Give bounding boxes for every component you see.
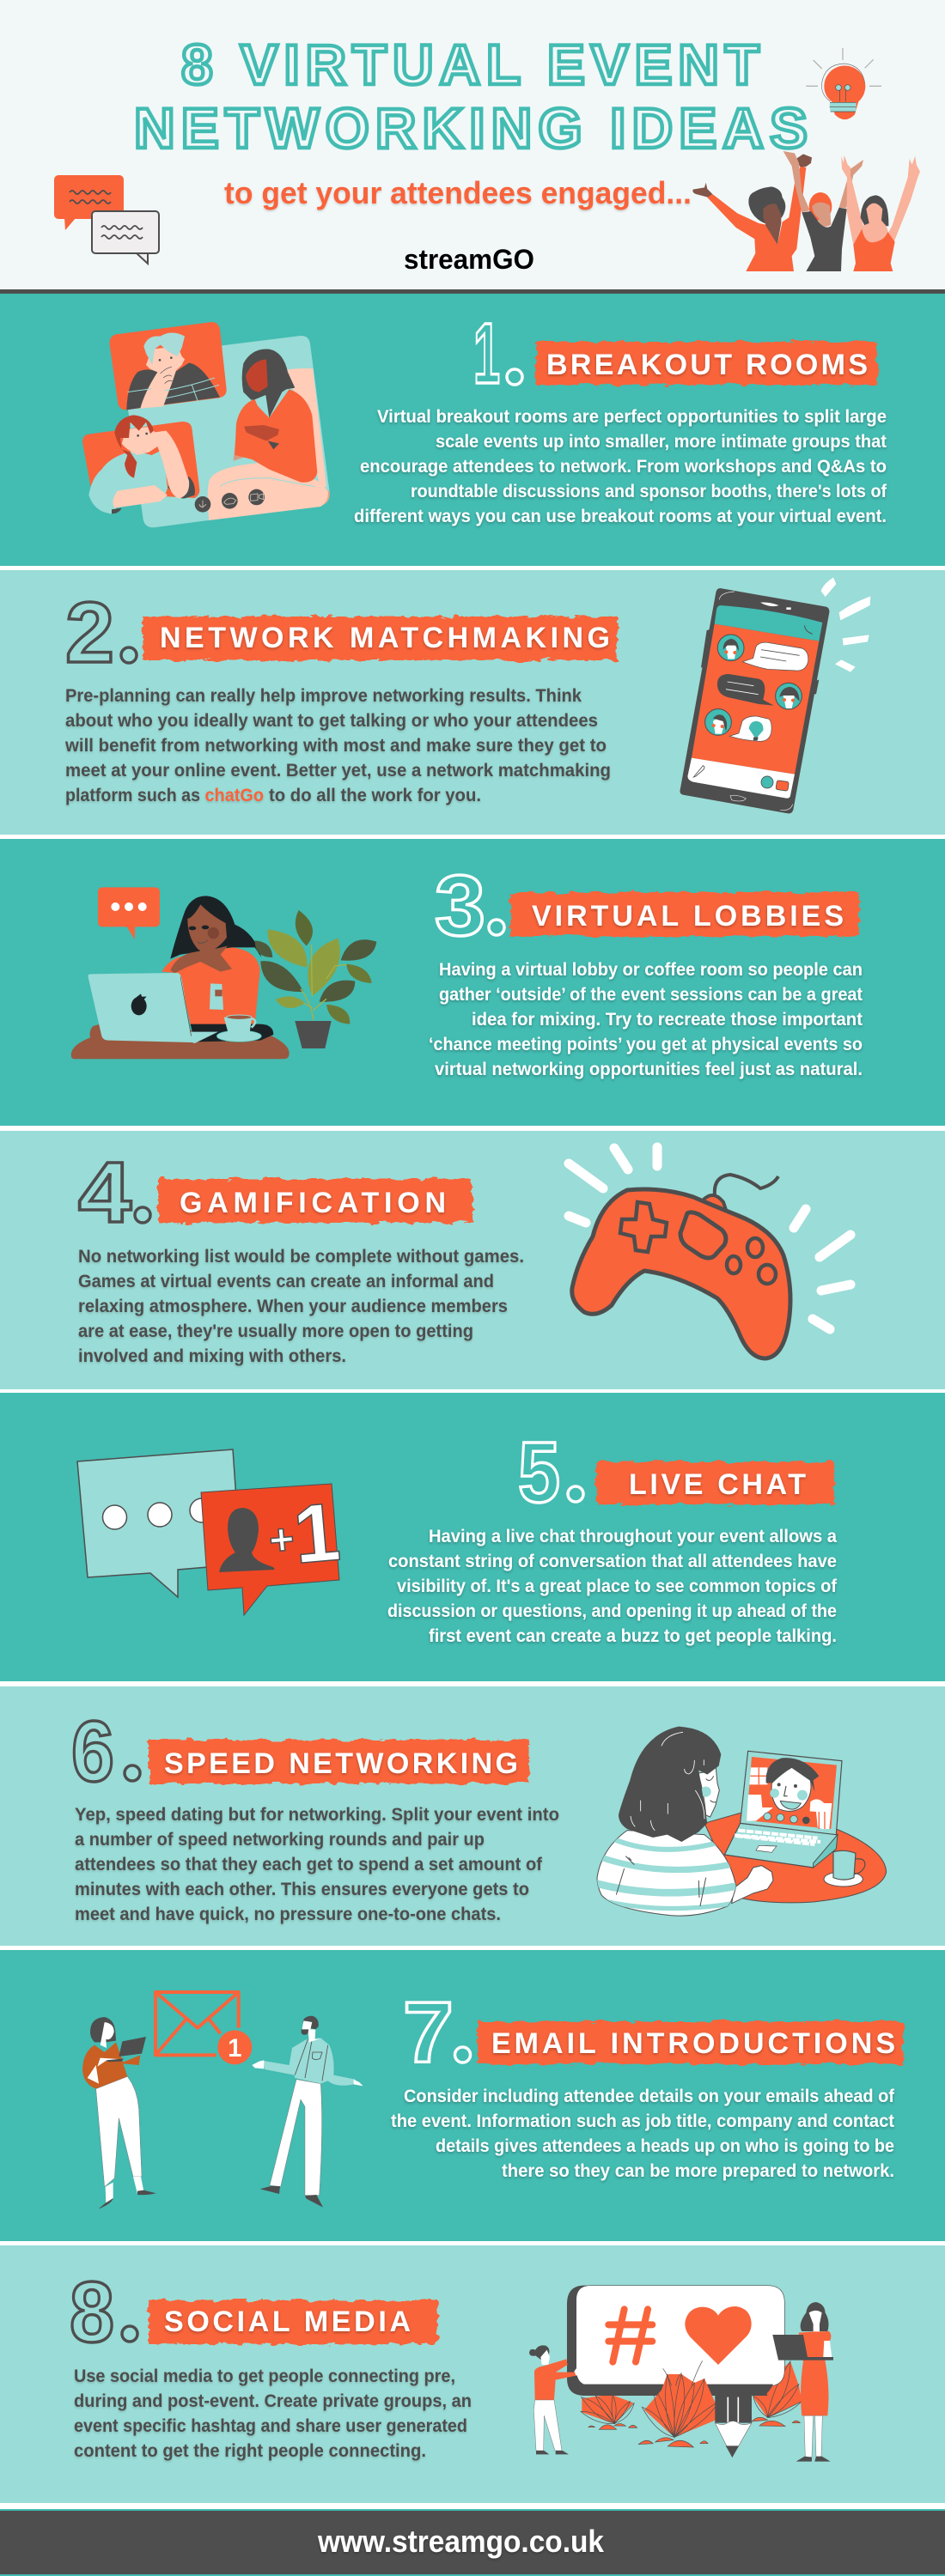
heading: live chat	[596, 1461, 834, 1504]
body text 6: minutes with each other. This ensures everyone gets to	[75, 1879, 529, 1899]
heading: live chat: LIVE CHAT	[629, 1468, 806, 1501]
body text 2: platform such as	[65, 785, 200, 805]
illustration: chat bubbles with plus one	[77, 1449, 344, 1615]
footer band	[0, 2509, 945, 2576]
body text 4: relaxing atmosphere. When your audience members	[78, 1296, 508, 1316]
ordinal ring 7	[455, 2047, 471, 2063]
illustration: email exchange	[82, 1992, 363, 2209]
body text 5	[387, 1526, 838, 1646]
ordinal ring 4	[135, 1207, 150, 1223]
body text 8: Use social media to get people connecting pre,	[74, 2366, 455, 2386]
body text 5: first event can create a buzz to get people talking.	[429, 1625, 837, 1646]
body text 5: Having a live chat throughout your event allows a	[429, 1526, 838, 1546]
body text 3: gather ‘outside’ of the event sessions can be a great	[439, 984, 863, 1005]
body text 6	[75, 1804, 559, 1924]
website url: www.streamgo.co.uk	[317, 2524, 605, 2559]
body text 2: will benefit from networking with most and make sure they get to	[64, 735, 607, 756]
icon: heart	[685, 2306, 752, 2365]
number 3: 3	[435, 858, 485, 954]
ordinal ring 5	[568, 1486, 583, 1502]
heading: email introductions: EMAIL INTRODUCTIONS	[491, 2027, 895, 2060]
illustration: woman at laptop	[71, 887, 376, 1059]
plus one: +	[267, 1515, 296, 1564]
illustration: smartphone chat	[680, 578, 870, 813]
body text 2: about who you ideally want to get talking or who your attendees	[65, 710, 598, 731]
body text 3	[429, 959, 863, 1079]
body text 2: meet at your online event. Better yet, use a network matchmaking	[65, 760, 611, 781]
heading: social media: SOCIAL MEDIA	[164, 2306, 411, 2338]
body text 1: Virtual breakout rooms are perfect opportunities to split large	[377, 406, 887, 427]
body text 4: Games at virtual events can create an informal and	[78, 1271, 494, 1291]
ordinal ring 6	[125, 1765, 140, 1781]
illustration: hashtag and heart board	[529, 2286, 833, 2462]
icon: envelope	[155, 1992, 252, 2064]
number 4: 4	[78, 1145, 131, 1241]
illustration: cheering people	[692, 151, 920, 271]
illustration: video call	[82, 322, 330, 527]
body text 1: encourage attendees to network. From workshops and Q&As to	[360, 456, 887, 477]
body text 1: scale events up into smaller, more intimate groups that	[436, 431, 887, 452]
panel: 4 gamification	[0, 1131, 945, 1389]
panel: 7 email introductions	[0, 1950, 945, 2241]
plus one: 1	[290, 1485, 344, 1581]
number 7: 7	[403, 1984, 454, 2081]
body text 4: No networking list would be complete without games.	[78, 1246, 524, 1267]
subtitle: to get your attendees engaged...	[224, 175, 692, 210]
illustration: game controller	[569, 1147, 850, 1358]
ordinal ring 2	[121, 647, 137, 663]
heading: speed networking: SPEED NETWORKING	[164, 1747, 518, 1780]
heading: virtual lobbies: VIRTUAL LOBBIES	[532, 900, 844, 933]
body text 8: during and post-event. Create private groups, an	[74, 2391, 472, 2411]
heading: gamification	[158, 1179, 472, 1223]
body text 6: attendees so that they each get to spend a set amount of	[75, 1854, 543, 1874]
body text 3: virtual networking opportunities feel just as natural.	[435, 1059, 863, 1079]
body text 8: event specific hashtag and share user generated	[74, 2415, 467, 2436]
ordinal ring 1	[507, 369, 522, 385]
body text 7: the event. Information such as job title, company and contact	[391, 2111, 894, 2131]
body text 3: ‘chance meeting points’ you get at physical events so	[429, 1034, 863, 1054]
title: 8 VIRTUAL EVENT	[181, 33, 759, 96]
icon: hashtag	[608, 2309, 652, 2362]
title: NETWORKING IDEAS	[134, 96, 808, 160]
body text 2: Pre-planning can really help improve networking results. Think	[65, 685, 582, 706]
heading: network matchmaking: NETWORK MATCHMAKING	[160, 622, 610, 654]
panel: 5 live chat	[0, 1393, 945, 1681]
body text 7	[391, 2086, 895, 2181]
body text 5: discussion or questions, and opening it up ahead of the	[387, 1601, 837, 1621]
heading: gamification: GAMIFICATION	[180, 1187, 446, 1219]
body text 6: meet and have quick, no pressure one-to-one chats.	[75, 1904, 501, 1924]
header panel	[0, 0, 945, 294]
illustration: woman on video call	[595, 1727, 887, 1916]
ordinal ring 3	[489, 920, 504, 935]
panel: 8 social media	[0, 2245, 945, 2503]
streamGO logo: streamGO	[404, 244, 534, 275]
icon: envelope: 1	[228, 2034, 241, 2063]
body text 7: there so they can be more prepared to network.	[502, 2160, 894, 2181]
body text 2: chatGo	[204, 785, 264, 805]
body text 6: Yep, speed dating but for networking. Split your event into	[75, 1804, 559, 1825]
body text 7: Consider including attendee details on your emails ahead of	[404, 2086, 895, 2106]
body text 2	[64, 685, 611, 805]
body text 8: content to get the right people connecting.	[74, 2440, 426, 2461]
body text 6: a number of speed networking rounds and pair up	[75, 1829, 485, 1850]
number 6: 6	[71, 1704, 114, 1800]
panel: 1 breakout rooms	[0, 294, 945, 566]
body text 1: different ways you can use breakout rooms at your virtual event.	[354, 506, 887, 526]
heading: breakout rooms: BREAKOUT ROOMS	[546, 349, 868, 381]
icon: chat bubbles	[54, 175, 159, 264]
heading: social media	[149, 2300, 437, 2344]
number 1: 1	[473, 306, 500, 402]
body text 1: roundtable discussions and sponsor booths, there's lots of	[411, 481, 887, 501]
body text 1	[354, 406, 887, 526]
heading: virtual lobbies	[510, 892, 859, 936]
number 5: 5	[518, 1425, 560, 1521]
icon: pencil	[715, 2396, 752, 2458]
panel: 3 virtual lobbies	[0, 839, 945, 1126]
ordinal ring 8	[122, 2326, 137, 2342]
body text 4: are at ease, they're usually more open to getting	[78, 1321, 473, 1341]
body text 5: constant string of conversation that all attendees have	[388, 1551, 837, 1571]
number 2: 2	[65, 585, 114, 681]
body text 5: visibility of. It's a great place to see common topics of	[397, 1576, 838, 1596]
panel: 6 speed networking	[0, 1686, 945, 1946]
title	[134, 33, 808, 160]
body text 2: to do all the work for you.	[269, 785, 481, 805]
body text 3: Having a virtual lobby or coffee room so people can	[439, 959, 863, 980]
icon: light bulb	[806, 48, 881, 119]
number 8: 8	[70, 2264, 114, 2360]
body text 7: details gives attendees a heads up on who is going to be	[436, 2136, 894, 2156]
panel: 2 network matchmaking	[0, 570, 945, 835]
heading: speed networking	[149, 1740, 529, 1783]
body text 4: involved and mixing with others.	[78, 1346, 346, 1366]
body text 4	[78, 1246, 524, 1366]
body text 3: idea for mixing. Try to recreate those important	[472, 1009, 863, 1030]
body text 8	[74, 2366, 472, 2461]
